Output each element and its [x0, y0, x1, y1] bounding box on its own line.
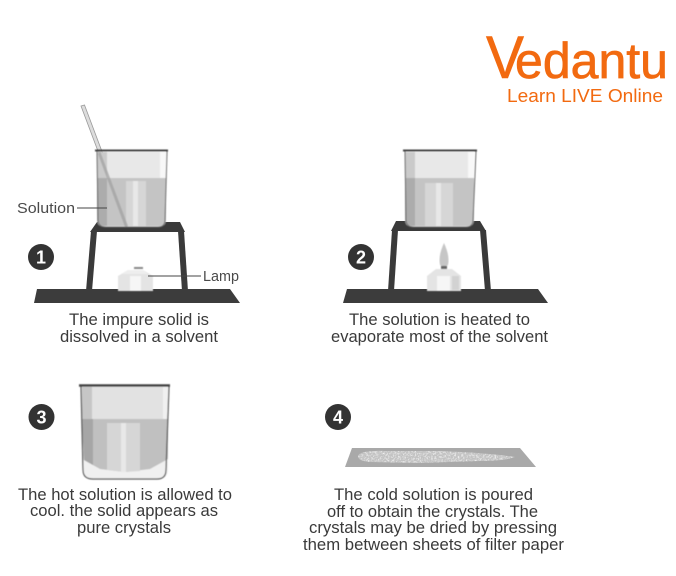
- caption 3: pure crystals: [77, 519, 171, 537]
- beaker with crystals: [79, 386, 170, 479]
- badge 2: 2: [356, 248, 366, 268]
- label: Solution: Solution: [17, 200, 75, 217]
- badge 1: 1: [36, 248, 46, 268]
- caption 1: [60, 311, 218, 346]
- logo wordmark: V: [486, 24, 524, 91]
- panel: step 4: [303, 404, 565, 554]
- badge 1: [28, 244, 54, 270]
- badge 2: [348, 244, 374, 270]
- caption 4: crystals may be dried by pressing: [309, 519, 557, 537]
- caption 3: The hot solution is allowed to: [18, 486, 232, 504]
- panel: step 1: [17, 105, 240, 346]
- label: Lamp: [148, 268, 239, 285]
- base plate: [34, 289, 240, 303]
- badge 4: [325, 404, 351, 430]
- caption 2: evaporate most of the solvent: [331, 328, 548, 346]
- stirring rod: [81, 105, 130, 227]
- badge 3: 3: [36, 408, 47, 428]
- caption 3: [18, 486, 232, 537]
- logo: Vedantu: [486, 24, 668, 106]
- panel: step 2: [331, 150, 548, 346]
- lamp: [118, 267, 153, 291]
- lamp: [427, 266, 461, 291]
- caption 2: The solution is heated to: [349, 311, 530, 329]
- logo wordmark: edantu: [515, 33, 668, 89]
- label: Lamp: Lamp: [203, 268, 239, 285]
- panel: step 3: [18, 386, 232, 537]
- logo tagline: Learn LIVE Online: [507, 85, 663, 106]
- caption 4: [303, 486, 565, 554]
- caption 4: off to obtain the crystals. The: [327, 503, 538, 521]
- caption 4: them between sheets of filter paper: [303, 536, 565, 554]
- caption 1: The impure solid is: [69, 311, 209, 329]
- flame: [440, 243, 448, 267]
- tripod stand: [388, 221, 491, 291]
- filter paper with crystals: [345, 448, 536, 467]
- beaker with solution: [95, 150, 168, 227]
- caption 2: [331, 311, 548, 346]
- tripod stand: [86, 222, 188, 291]
- badge 3: [28, 404, 54, 430]
- label: Solution: [17, 200, 107, 217]
- caption 4: The cold solution is poured: [334, 486, 533, 504]
- caption 3: cool. the solid appears as: [30, 502, 218, 520]
- beaker with solution: [403, 150, 477, 227]
- caption 1: dissolved in a solvent: [60, 328, 218, 346]
- base plate: [343, 289, 548, 303]
- badge 4: 4: [333, 408, 343, 428]
